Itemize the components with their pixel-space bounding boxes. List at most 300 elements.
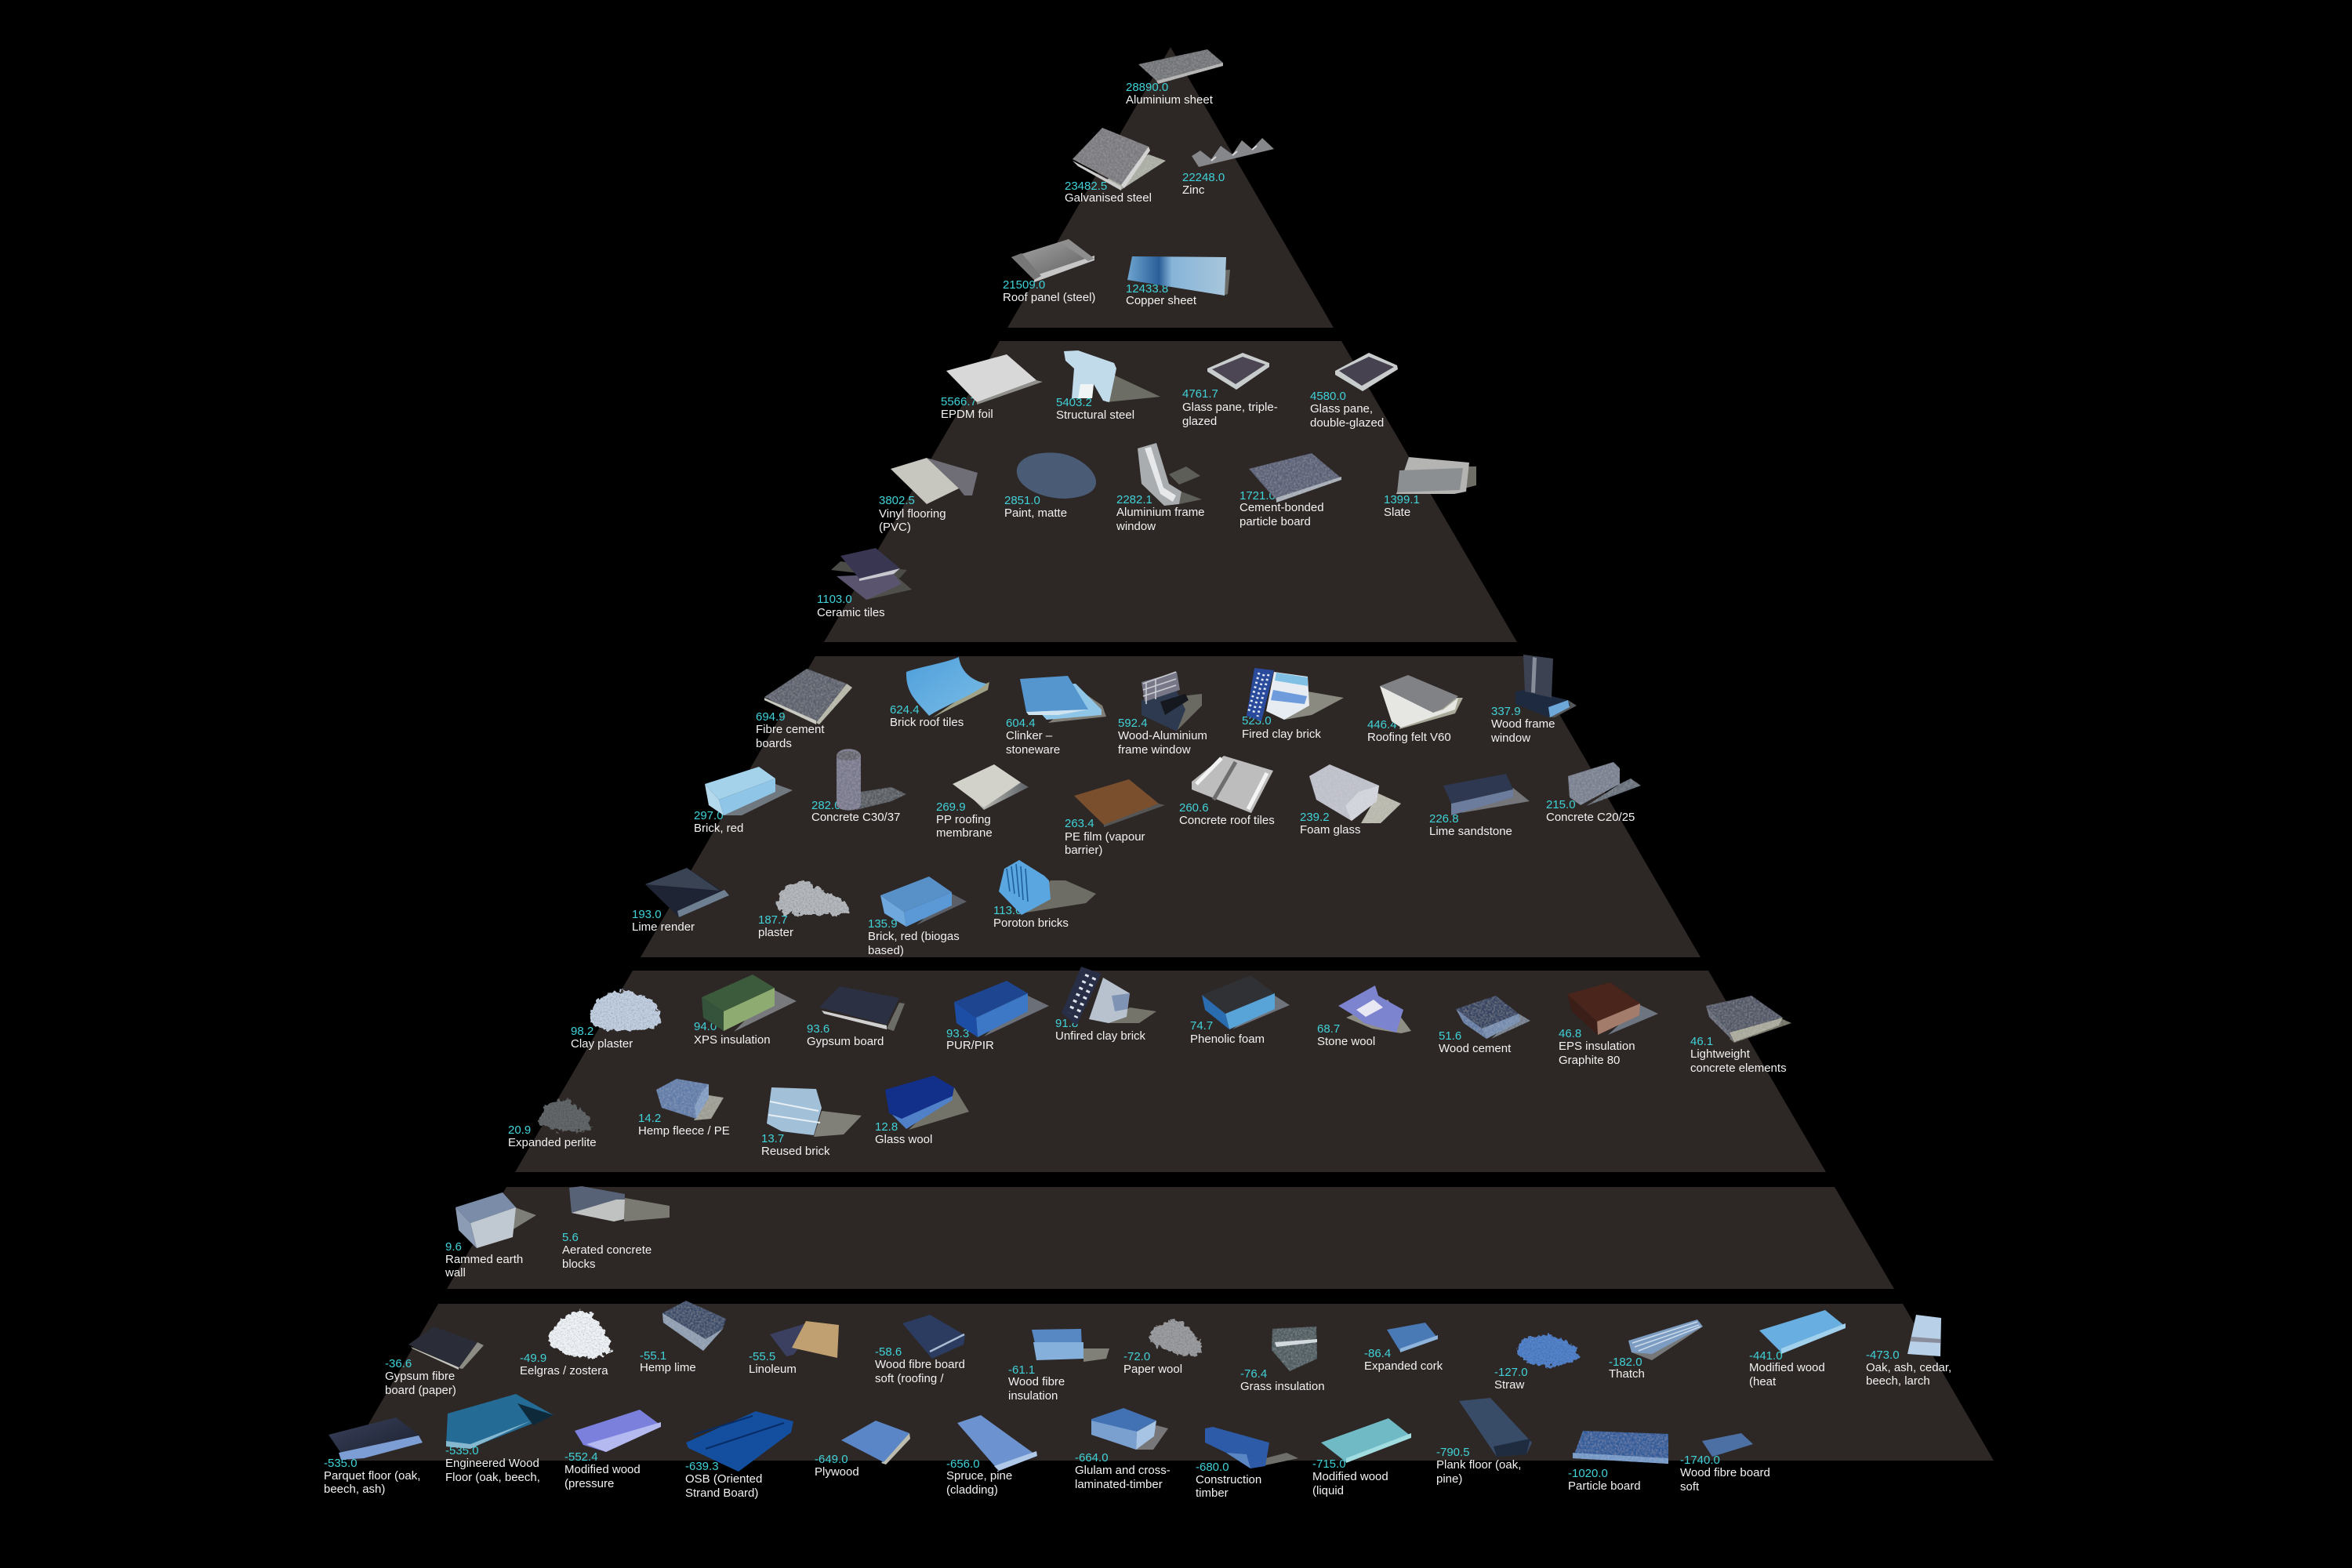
text: based)	[868, 944, 904, 957]
material: XPS insulation	[694, 975, 797, 1047]
text: 263.4	[1065, 817, 1094, 830]
icon: gypsum fibre board	[408, 1327, 484, 1370]
text: Modified wood	[1312, 1470, 1388, 1483]
text: 74.7	[1190, 1019, 1213, 1033]
text: -76.4	[1240, 1367, 1267, 1381]
material: Cement-bonded particle board	[1240, 453, 1341, 528]
text: Foam glass	[1300, 823, 1361, 837]
icon: lime sandstone	[1443, 774, 1530, 815]
text: 5566.7	[941, 395, 977, 408]
icon: hemp fleece	[656, 1079, 724, 1120]
icon: OSB board	[686, 1411, 793, 1472]
text: 282.0	[811, 799, 841, 812]
text: Stone wool	[1317, 1035, 1375, 1048]
text: Particle board	[1568, 1479, 1641, 1493]
text	[1490, 705, 1555, 745]
material: Modified wood (pressure	[564, 1410, 661, 1490]
material: EPDM foil	[941, 354, 1043, 421]
text: -639.3	[685, 1460, 719, 1473]
text: Lime sandstone	[1429, 825, 1512, 838]
text: wall	[445, 1266, 466, 1279]
text	[1364, 1347, 1443, 1373]
text: 135.9	[868, 917, 898, 931]
text: 93.3	[946, 1027, 969, 1040]
text: Thatch	[1609, 1367, 1645, 1381]
text: 46.8	[1559, 1027, 1581, 1040]
pyramid background	[347, 47, 1994, 1461]
icon: aluminium window frame	[1138, 443, 1202, 506]
text: Aluminium sheet	[1126, 93, 1214, 107]
text	[815, 1453, 859, 1479]
text: 13.7	[761, 1132, 784, 1145]
text: EPDM foil	[941, 408, 993, 421]
text	[445, 1240, 523, 1279]
text: 28890.0	[1126, 81, 1168, 94]
text	[445, 1444, 540, 1484]
text	[749, 1350, 797, 1376]
material: Grass insulation	[1240, 1327, 1325, 1393]
tier 2	[824, 341, 1517, 642]
text: -473.0	[1866, 1348, 1900, 1362]
icon: wood fibre insulation	[1032, 1329, 1109, 1362]
material: Glass pane, triple-glazed	[1182, 353, 1278, 428]
text: -649.0	[815, 1453, 848, 1466]
icon: paper wool pile	[1149, 1320, 1201, 1356]
text: Engineered Wood	[445, 1457, 539, 1470]
text: Expanded perlite	[508, 1136, 597, 1149]
text: Linoleum	[749, 1363, 797, 1376]
text: Zinc	[1182, 183, 1205, 197]
material: Wood fibre board soft	[1680, 1433, 1770, 1494]
text: Concrete C20/25	[1546, 811, 1635, 824]
text	[875, 1120, 932, 1146]
text: plaster	[758, 926, 793, 939]
icon: cement-bonded board	[1249, 453, 1341, 503]
text: 113.0	[993, 904, 1022, 917]
material: Reused brick	[761, 1087, 862, 1158]
text: Paper wool	[1123, 1363, 1182, 1376]
text	[875, 1345, 965, 1385]
material: Copper sheet	[1126, 256, 1230, 307]
text	[385, 1357, 456, 1397]
text: Copper sheet	[1126, 294, 1197, 307]
text: Gypsum fibre	[385, 1370, 455, 1383]
text: Aluminium frame	[1116, 506, 1205, 519]
text	[1866, 1348, 1951, 1388]
material: Modified wood (heat	[1749, 1310, 1846, 1388]
text: -36.6	[385, 1357, 412, 1370]
text	[1118, 717, 1207, 757]
text	[1367, 718, 1451, 744]
text: Galvanised steel	[1065, 191, 1152, 205]
icon: EPS graphite block	[1567, 982, 1658, 1035]
text	[1065, 817, 1145, 857]
text: 22248.0	[1182, 171, 1225, 184]
material: Spruce, pine (cladding)	[946, 1415, 1037, 1497]
text	[685, 1460, 762, 1500]
text: Glass pane, triple-	[1182, 401, 1278, 414]
material: Modified wood (liquid	[1312, 1418, 1411, 1497]
icon: galvanised steel	[1073, 128, 1166, 191]
text: 269.9	[936, 800, 966, 814]
material: Aluminium frame window	[1116, 443, 1205, 533]
text	[640, 1349, 696, 1374]
icon: slate	[1396, 457, 1476, 494]
text: Wood frame	[1491, 717, 1555, 731]
text	[694, 1020, 771, 1047]
text	[941, 395, 993, 421]
text	[1312, 1457, 1388, 1497]
icon: roof panel	[1011, 239, 1094, 282]
text: Graphite 80	[1559, 1054, 1620, 1067]
tier 5	[447, 1187, 1894, 1289]
icon: soft wood fibre roofing board	[902, 1315, 965, 1359]
text: 93.6	[807, 1022, 829, 1036]
text: Wood fibre board	[1680, 1466, 1770, 1479]
text: 20.9	[508, 1123, 531, 1137]
icon: fibre cement board	[764, 669, 852, 724]
text: 446.4	[1367, 718, 1397, 731]
text: 239.2	[1300, 811, 1330, 824]
text: 3802.5	[879, 494, 915, 507]
icon: wood frame window	[1515, 655, 1577, 717]
icon: copper sheet	[1127, 256, 1230, 296]
icon: construction timber	[1205, 1427, 1298, 1468]
material: Fired clay brick	[1242, 668, 1344, 741]
material: Clay plaster	[571, 991, 661, 1051]
text: Plank floor (oak,	[1436, 1458, 1521, 1472]
text: 46.1	[1690, 1035, 1713, 1048]
text: Structural steel	[1056, 408, 1134, 422]
icon: liquid-modified wood	[1321, 1418, 1411, 1463]
text: Fibre cement	[756, 723, 825, 736]
material: PP roofing membrane	[936, 764, 1029, 840]
text: -790.5	[1436, 1446, 1470, 1459]
material: Wood-Aluminium frame window	[1118, 672, 1207, 757]
icon: spruce cladding	[957, 1415, 1037, 1471]
text: Spruce, pine	[946, 1469, 1012, 1483]
icon: double glazed pane	[1335, 353, 1398, 391]
text	[632, 908, 695, 934]
text: 1103.0	[817, 593, 852, 606]
text	[946, 1027, 994, 1052]
text	[1006, 717, 1060, 757]
text	[1242, 714, 1321, 741]
text: Fired clay brick	[1242, 728, 1321, 741]
text: Construction	[1196, 1473, 1261, 1486]
text: -127.0	[1494, 1366, 1528, 1379]
text: 624.4	[890, 703, 920, 717]
text: concrete elements	[1690, 1062, 1787, 1075]
text: Concrete roof tiles	[1179, 814, 1275, 827]
material: Wood fibre insulation	[1008, 1329, 1109, 1403]
material: Eelgras / zostera	[520, 1311, 610, 1377]
text: boards	[756, 737, 792, 750]
text: 91.8	[1055, 1017, 1078, 1030]
text: Hemp lime	[640, 1361, 696, 1374]
text: 5403.2	[1056, 396, 1092, 409]
text: Glass wool	[875, 1133, 932, 1146]
material: Brick, red (biogas based)	[868, 877, 967, 957]
material: Plank floor (oak, pine)	[1436, 1398, 1532, 1486]
text: 5.6	[562, 1231, 579, 1244]
material: Stone wool	[1317, 985, 1411, 1048]
icon: grass insulation block	[1272, 1327, 1317, 1371]
text: pine)	[1436, 1472, 1462, 1486]
text: 592.4	[1118, 717, 1148, 730]
text: 23482.5	[1065, 180, 1107, 193]
text: 4761.7	[1182, 387, 1218, 401]
text: -55.1	[640, 1349, 666, 1363]
text	[868, 917, 960, 957]
icon: concrete cylinder	[837, 749, 906, 811]
text	[817, 593, 885, 619]
text	[1075, 1451, 1171, 1491]
icon: PE film	[1074, 779, 1165, 827]
text: -715.0	[1312, 1457, 1346, 1471]
text: 215.0	[1546, 798, 1576, 811]
text	[1559, 1027, 1635, 1067]
text: Brick, red (biogas	[868, 930, 960, 943]
material: Aluminium sheet	[1126, 49, 1223, 107]
text: (liquid	[1312, 1484, 1344, 1497]
text	[1196, 1461, 1261, 1500]
text: 51.6	[1439, 1029, 1461, 1043]
material: Unfired clay brick	[1055, 967, 1156, 1043]
text: beech, larch	[1866, 1374, 1930, 1388]
text: -61.1	[1008, 1363, 1035, 1377]
icon: phenolic foam	[1202, 975, 1290, 1029]
material: Parquet floor (oak, beech, ash)	[324, 1417, 423, 1496]
icon: roofing felt	[1380, 675, 1463, 729]
text: 337.9	[1491, 705, 1521, 718]
text	[1680, 1454, 1770, 1494]
text: Poroton bricks	[993, 916, 1069, 930]
icon: linoleum	[770, 1321, 839, 1358]
text: Oak, ash, cedar,	[1866, 1361, 1951, 1374]
text	[324, 1457, 420, 1496]
material: plaster	[758, 881, 849, 939]
icon: PP roofing membrane	[953, 764, 1029, 810]
material: Plywood	[815, 1421, 910, 1479]
text	[564, 1450, 641, 1490]
icon: parquet floor	[328, 1417, 423, 1460]
material: Lime sandstone	[1429, 774, 1530, 838]
icon: eelgrass pile	[549, 1311, 610, 1358]
material: Wood frame window	[1490, 655, 1577, 745]
text: Rammed earth	[445, 1253, 523, 1266]
text: OSB (Oriented	[685, 1472, 762, 1486]
text: 12433.8	[1126, 282, 1168, 296]
text: Eelgras / zostera	[520, 1364, 608, 1377]
text: (pressure	[564, 1477, 614, 1490]
icon: plaster pile	[776, 881, 849, 914]
text: 297.0	[694, 809, 724, 822]
text	[946, 1457, 1012, 1497]
icon: foam glass	[1309, 764, 1401, 823]
text: 94.0	[694, 1020, 717, 1033]
material: Paper wool	[1123, 1320, 1201, 1376]
text: Unfired clay brick	[1055, 1029, 1146, 1043]
text: 1721.0	[1240, 489, 1276, 503]
text	[1126, 81, 1214, 107]
text: XPS insulation	[694, 1033, 771, 1047]
icon: straw pile	[1517, 1335, 1578, 1366]
material: Wood cement	[1439, 996, 1530, 1055]
text: Modified wood	[564, 1463, 641, 1476]
text: frame window	[1118, 743, 1191, 757]
text	[807, 1022, 884, 1048]
material: Galvanised steel	[1065, 128, 1166, 205]
text: Wood cement	[1439, 1042, 1512, 1055]
text: timber	[1196, 1486, 1229, 1500]
text	[562, 1231, 652, 1271]
text: 260.6	[1179, 801, 1209, 815]
text	[1123, 1350, 1182, 1376]
text: Parquet floor (oak,	[324, 1469, 420, 1483]
text	[1690, 1035, 1787, 1075]
material: PE film (vapour barrier)	[1065, 779, 1165, 857]
text: particle board	[1240, 515, 1311, 528]
text: -552.4	[564, 1450, 598, 1464]
icon: triple glazed pane	[1207, 353, 1269, 390]
icon: clinker tiles	[1020, 676, 1106, 723]
icon: fired clay brick	[1247, 668, 1344, 721]
text	[638, 1112, 730, 1138]
text: 12.8	[875, 1120, 898, 1134]
text: 9.6	[445, 1240, 462, 1254]
text	[1546, 798, 1635, 824]
text: -535.0	[445, 1444, 479, 1457]
tier 6: negative carbon materials	[347, 1304, 1994, 1461]
material: Aerated concrete blocks	[562, 1186, 670, 1271]
material: Straw	[1494, 1335, 1578, 1392]
tier 1: highest carbon metals	[1007, 47, 1334, 328]
material: Ceramic tiles	[817, 548, 912, 619]
text: Expanded cork	[1364, 1359, 1443, 1373]
text	[1240, 1367, 1325, 1393]
text: glazed	[1182, 415, 1217, 428]
icon: soft wood fibre board	[1702, 1433, 1753, 1457]
icon: steel I-beam	[1064, 350, 1160, 402]
material: Thatch	[1609, 1319, 1703, 1381]
icon: particle board	[1573, 1431, 1668, 1464]
icon: thatch bundle	[1628, 1319, 1703, 1360]
text: -182.0	[1609, 1356, 1642, 1369]
text: EPS insulation	[1559, 1040, 1635, 1053]
text: Brick, red	[694, 822, 743, 835]
text: 193.0	[632, 908, 662, 921]
icon: vinyl flooring	[891, 458, 978, 504]
icon: rammed earth block	[456, 1192, 536, 1248]
material: Slate	[1384, 457, 1476, 519]
material: Clinker - stoneware	[1006, 676, 1106, 757]
material: Zinc	[1182, 138, 1274, 197]
text: Wood fibre	[1008, 1375, 1065, 1388]
text: -1020.0	[1568, 1467, 1608, 1480]
material: Glass wool	[875, 1076, 969, 1146]
text: board (paper)	[385, 1384, 456, 1397]
text	[758, 913, 793, 939]
text: stoneware	[1006, 743, 1060, 757]
material: Vinyl flooring (PVC)	[879, 458, 978, 534]
material: Fibre cement boards	[756, 669, 852, 750]
text	[1317, 1022, 1375, 1048]
text: Ceramic tiles	[817, 606, 885, 619]
text: 68.7	[1317, 1022, 1340, 1036]
icon: heat-modified wood	[1759, 1310, 1846, 1354]
text: Roofing felt V60	[1367, 731, 1451, 744]
text: membrane	[936, 826, 993, 840]
text: 604.4	[1006, 717, 1036, 730]
text: 4580.0	[1310, 390, 1346, 403]
icon: EPDM foil	[946, 354, 1043, 405]
text: -441.0	[1749, 1349, 1783, 1363]
text: Gypsum board	[807, 1035, 884, 1048]
icon: reused bricks	[767, 1087, 862, 1137]
text: window	[1116, 520, 1156, 533]
text: blocks	[562, 1258, 596, 1271]
text: (heat	[1749, 1375, 1777, 1388]
text: -1740.0	[1680, 1454, 1720, 1467]
text: Reused brick	[761, 1145, 830, 1158]
text	[761, 1132, 830, 1158]
text	[1300, 811, 1361, 837]
text	[1439, 1029, 1512, 1055]
material: Gypsum fibre board (paper)	[385, 1327, 484, 1397]
text: Strand Board)	[685, 1486, 758, 1500]
text: PE film (vapour	[1065, 830, 1145, 844]
icon: biogas brick	[880, 877, 967, 927]
icon: aerated concrete block	[569, 1186, 670, 1221]
material: Gypsum board	[807, 986, 905, 1048]
text	[1240, 489, 1324, 528]
text	[1116, 493, 1205, 533]
text	[936, 800, 993, 840]
text: 14.2	[638, 1112, 661, 1125]
icon: aluminium sheet	[1138, 49, 1223, 84]
text: Wood fibre board	[875, 1358, 965, 1371]
text	[1310, 390, 1384, 430]
material: Expanded perlite	[508, 1099, 597, 1149]
text	[1494, 1366, 1528, 1392]
icon: paint blob	[1017, 452, 1096, 499]
text: -58.6	[875, 1345, 902, 1359]
material: Wood fibre board soft (roofing /	[875, 1315, 965, 1385]
icon: wood cement	[1456, 996, 1530, 1039]
text: barrier)	[1065, 844, 1102, 857]
text: 187.7	[758, 913, 788, 927]
material: Particle board	[1568, 1431, 1668, 1493]
text	[1190, 1019, 1265, 1046]
text	[1749, 1349, 1825, 1388]
icon: ceramic tiles	[831, 548, 912, 600]
text	[1055, 1017, 1146, 1043]
icon: hardwood block	[1907, 1315, 1941, 1356]
text	[694, 809, 743, 835]
text	[1179, 801, 1275, 827]
icon: lightweight concrete	[1706, 996, 1791, 1043]
text: PP roofing	[936, 813, 991, 826]
text: Paint, matte	[1004, 506, 1067, 520]
text: Roof panel (steel)	[1003, 291, 1095, 304]
material: Brick roof tiles	[890, 657, 989, 729]
material: Expanded cork	[1364, 1323, 1443, 1373]
material: Linoleum	[749, 1321, 839, 1376]
text: -535.0	[324, 1457, 358, 1470]
text	[1436, 1446, 1521, 1486]
icon: XPS block	[702, 975, 797, 1032]
